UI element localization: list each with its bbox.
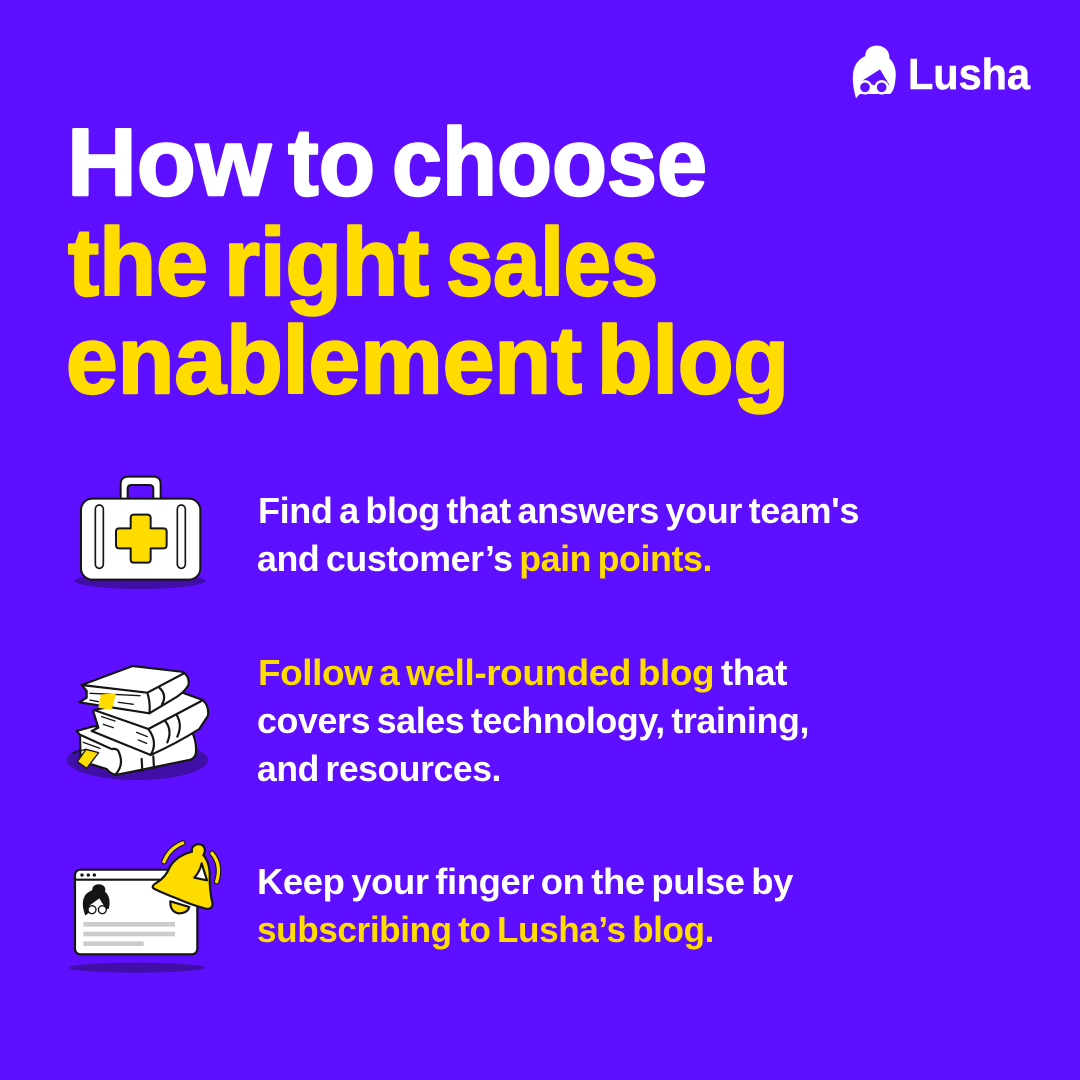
title line 1 bbox=[67, 109, 707, 216]
title line 1: How bbox=[67, 109, 271, 216]
line 2: subscribing to Lusha’s blog. bbox=[257, 909, 714, 950]
line 1: Follow a well-rounded blog that bbox=[258, 652, 787, 693]
logo: Lusha bbox=[853, 46, 1030, 99]
title bbox=[66, 109, 789, 414]
text block: well-rounded blog bbox=[257, 652, 809, 789]
icon: stack of books bbox=[67, 666, 208, 780]
line 1: Find a blog that answers your team's bbox=[258, 490, 859, 531]
icon: first aid kit bbox=[75, 477, 205, 589]
text block: pain points bbox=[257, 490, 859, 579]
line 1: Keep your finger on the pulse by bbox=[257, 861, 793, 902]
top book bbox=[79, 666, 189, 713]
bell highlight bbox=[194, 863, 207, 880]
title line 2 bbox=[68, 209, 658, 316]
icon: browser window with bell bbox=[69, 843, 219, 973]
avatar bbox=[83, 884, 110, 916]
bookmark bbox=[98, 693, 116, 710]
title line 3: blog bbox=[597, 307, 789, 414]
logo wordmark: Lusha bbox=[908, 50, 1030, 99]
text block: subscribe bbox=[257, 861, 793, 950]
line 2: and customer’s pain points. bbox=[257, 538, 712, 579]
icon: Lusha logo head bbox=[853, 46, 896, 98]
bottom book bbox=[77, 726, 196, 775]
title line 2: the bbox=[68, 209, 208, 316]
sound waves bbox=[164, 843, 183, 862]
bell clapper bbox=[170, 901, 189, 913]
title line 1: choose bbox=[392, 109, 707, 216]
title line 2: right bbox=[224, 209, 429, 316]
title line 2: sales bbox=[446, 209, 658, 316]
placeholder lines bbox=[83, 922, 175, 927]
title line 1: to bbox=[288, 109, 375, 216]
title line 3: enablement bbox=[66, 307, 582, 414]
middle book bbox=[92, 692, 208, 755]
line 2: covers sales technology, training, bbox=[257, 700, 809, 741]
line 3: and resources. bbox=[257, 748, 501, 789]
bell body bbox=[153, 844, 213, 909]
browser window bbox=[75, 870, 197, 954]
